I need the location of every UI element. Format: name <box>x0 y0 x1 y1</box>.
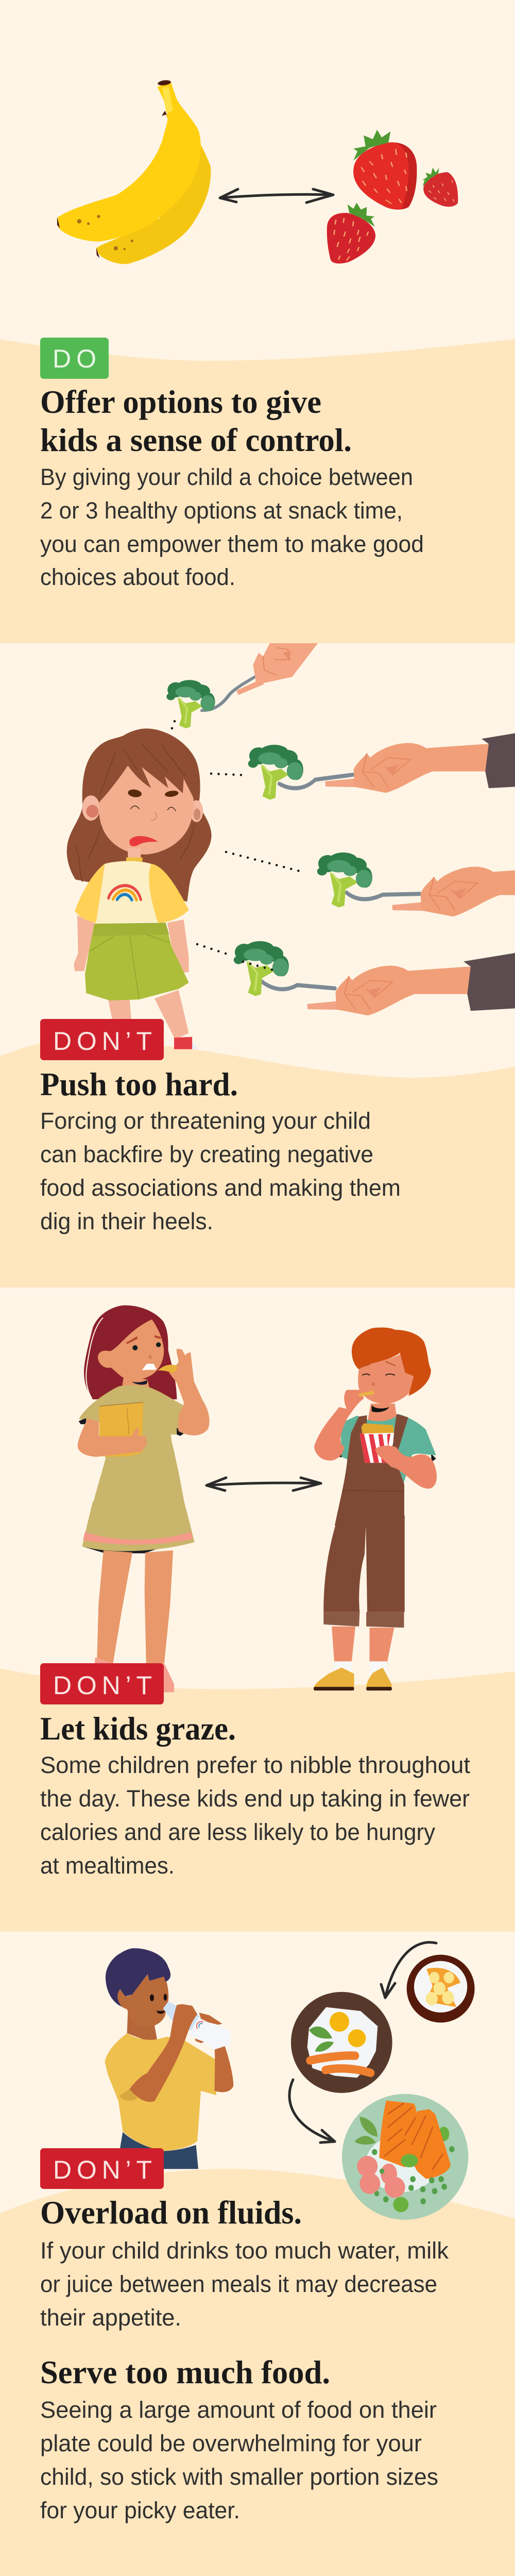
illustration: upset girl <box>67 728 212 1040</box>
body text: food: plate could be overwhelming for your <box>40 2430 422 2456</box>
body text: choices about food. <box>40 564 235 590</box>
body text: fluids: If your child drinks too much water, milk <box>40 2237 449 2264</box>
icon: bananas <box>57 79 211 264</box>
heading: food: Serve too much food. <box>40 2354 330 2390</box>
heading: Offer options to give <box>40 384 321 420</box>
heading: kids a sense of control. <box>40 422 352 458</box>
body text: food: Seeing a large amount of food on their <box>40 2397 437 2423</box>
body text: fluids <box>40 2237 449 2331</box>
wave band <box>0 1668 515 1932</box>
icon: strawberries <box>327 130 458 263</box>
body text: fluids: their appetite. <box>40 2304 181 2331</box>
plates of food <box>291 1955 475 2220</box>
body text: you can empower them to make good <box>40 531 424 557</box>
small plate: pizza <box>407 1955 475 2022</box>
body text: fluids: or juice between meals it may decrease <box>40 2271 437 2297</box>
badge: DON'T: DON’T <box>53 1671 152 1700</box>
badge: DON'T <box>40 1663 164 1704</box>
large plate: salmon and peas <box>342 2094 468 2220</box>
illustration: boy eating fries <box>314 1328 437 1691</box>
body text: calories and are less likely to be hungry <box>40 1819 435 1845</box>
arrow: two-way between fruits <box>220 189 333 203</box>
wave band <box>0 2169 515 2576</box>
body text: the day. These kids end up taking in fewer <box>40 1785 470 1812</box>
body text: food: for your picky eater. <box>40 2497 240 2523</box>
illustration: fourth hand with broccoli <box>234 941 515 1015</box>
panel: don't overload or overserve <box>0 1943 515 2576</box>
wave band <box>0 1042 515 1287</box>
body text: food <box>40 2397 438 2523</box>
badge: DON'T: DON’T <box>53 1027 152 1056</box>
arrows between plates <box>289 1943 436 2143</box>
panel: do offer options <box>0 79 515 643</box>
body text: Some children prefer to nibble throughout <box>40 1752 470 1778</box>
badge: DON'T <box>40 1019 164 1060</box>
arrow: two-way between children <box>207 1478 321 1491</box>
illustration: boy drinking <box>105 1948 233 2169</box>
girl upper body <box>78 1306 210 1515</box>
badge: DON'T <box>40 2148 164 2189</box>
boy upper body <box>314 1328 437 1526</box>
body text: at mealtimes. <box>40 1852 175 1879</box>
badge: DON'T: DON’T <box>53 2155 152 2184</box>
body text: food associations and making them <box>40 1175 401 1201</box>
body text <box>40 1752 470 1879</box>
panel: don't push too hard <box>0 643 515 1287</box>
body text: 2 or 3 healthy options at snack time, <box>40 497 403 524</box>
body text: By giving your child a choice between <box>40 464 413 490</box>
girl legs and hem <box>82 1501 195 1692</box>
boy legs <box>314 1515 405 1691</box>
badge: DO: DO <box>53 344 96 373</box>
body text <box>40 464 424 590</box>
dotted lines <box>172 714 303 970</box>
body text: food: child, so stick with smaller portion sizes <box>40 2464 438 2490</box>
skirt <box>85 923 189 1000</box>
body text: can backfire by creating negative <box>40 1141 373 1167</box>
illustration: second hand with broccoli <box>248 728 515 800</box>
girl's legs <box>108 990 189 1040</box>
illustration: top hand with fork and broccoli <box>166 643 318 728</box>
heading: Let kids graze. <box>40 1711 236 1747</box>
illustration: third hand with broccoli <box>317 852 515 916</box>
body text <box>40 1108 401 1234</box>
girl's face <box>82 765 203 855</box>
body text: dig in their heels. <box>40 1208 213 1234</box>
heading: Push too hard. <box>40 1066 238 1102</box>
forks <box>261 775 420 989</box>
illustration: girl eating chips <box>78 1306 210 1692</box>
heading: fluids: Overload on fluids. <box>40 2195 302 2231</box>
body text: Forcing or threatening your child <box>40 1108 371 1134</box>
badge: DO <box>40 338 109 379</box>
wave band <box>0 339 515 643</box>
middle plate: eggs and sausages <box>291 1992 392 2093</box>
arms <box>74 915 189 973</box>
shirt with rainbow <box>75 861 189 924</box>
girl's shoe <box>174 1037 199 1049</box>
panel: don't let kids graze <box>0 1306 515 1932</box>
